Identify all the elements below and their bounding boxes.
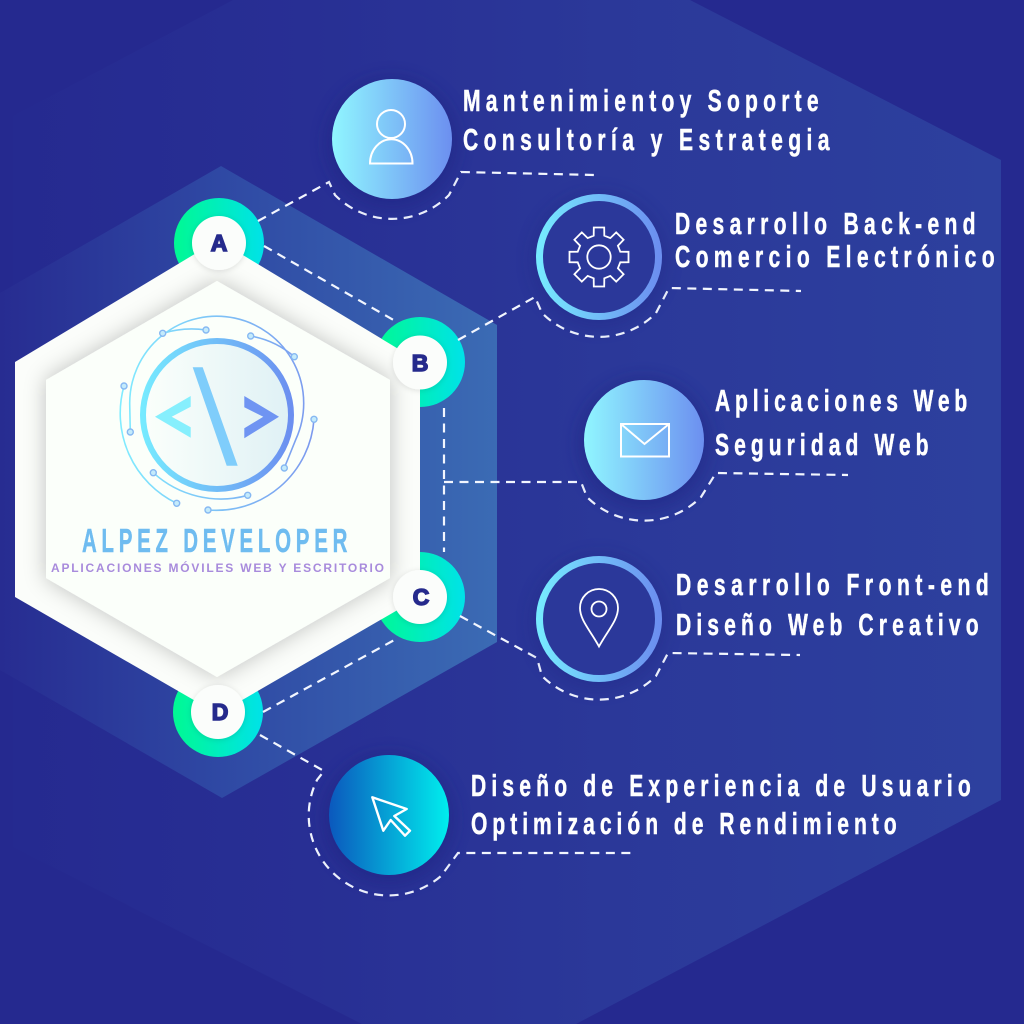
badge rings: [173, 198, 465, 757]
badge B: B: [412, 350, 428, 376]
text block: user experience: [471, 768, 971, 841]
badge A: [192, 216, 246, 270]
badge C: [393, 570, 447, 624]
text block: front-end: [676, 567, 989, 642]
icon: person: [326, 77, 458, 209]
text block: maintenance: Consultoría y Estrategia: [463, 122, 830, 157]
badge C: C: [413, 584, 429, 610]
text block: web: Aplicaciones Web: [715, 383, 967, 418]
background medium hexagon: [0, 166, 497, 798]
brand tagline: APLICACIONES MÓVILES WEB Y ESCRITORIO: [51, 560, 384, 575]
connector lines: [258, 172, 848, 895]
badge B: [393, 336, 447, 390]
text block: back-end: [675, 206, 995, 274]
text block: web: Seguridad Web: [715, 427, 929, 462]
text block: web: [715, 383, 967, 462]
text block: front-end: Desarrollo Front-end: [676, 567, 989, 602]
badge A: A: [211, 230, 227, 256]
brand name: ALPEZ DEVELOPER: [82, 522, 347, 559]
panel: central hexagon: [15, 240, 420, 714]
badge D: [191, 685, 245, 739]
text block: front-end: Diseño Web Creativo: [676, 607, 979, 642]
icon: cursor: [323, 753, 455, 885]
badge D: D: [212, 699, 228, 725]
icon: location pin: [531, 554, 667, 690]
icon: gear: [531, 192, 667, 328]
inner hexagon: [46, 281, 390, 677]
text block: back-end: Desarrollo Back-end: [675, 206, 976, 241]
logo icon: [120, 316, 317, 513]
text block: user experience: Diseño de Experiencia de Usuario: [471, 768, 971, 803]
text block: maintenance: Mantenimientoy Soporte: [463, 83, 819, 118]
text block: maintenance: [463, 83, 830, 157]
icon: envelope: [578, 378, 710, 510]
text block: back-end: Comercio Electrónico: [675, 239, 995, 274]
text block: user experience: Optimización de Rendimiento: [471, 806, 897, 841]
